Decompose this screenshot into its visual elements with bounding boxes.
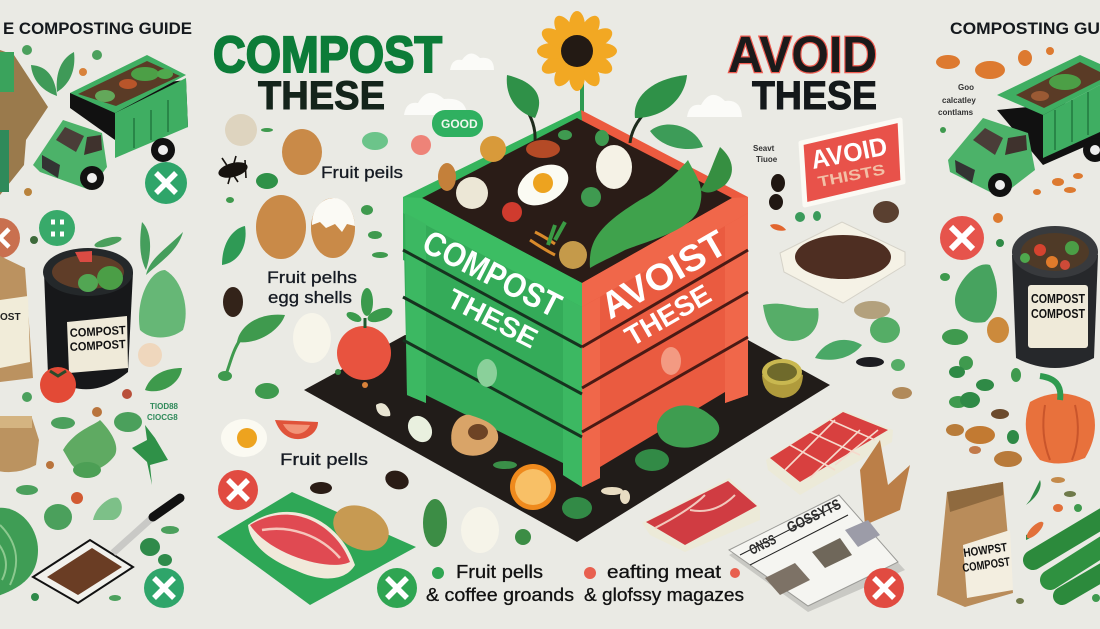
items on platform — [335, 369, 719, 519]
compost crate — [403, 110, 748, 487]
icon: right red cross — [864, 568, 904, 608]
newspaper: GOSSYTS — [784, 496, 844, 537]
coffee beans — [310, 467, 411, 494]
crate lettering avoid: AVOIST — [594, 222, 734, 327]
icon: paper bundle — [860, 440, 910, 525]
label: fruit peels egg shells — [267, 268, 357, 307]
icon: green cross bottom centre — [377, 568, 417, 608]
icon: compost bucket — [43, 248, 133, 389]
legend: avoid list: & glofssy magazes — [584, 585, 744, 605]
crate green body — [403, 197, 582, 487]
label: small note: Tiuoe — [756, 155, 778, 164]
icon: orange — [510, 464, 556, 510]
right leaf scatter — [940, 127, 1100, 604]
icon: olive bowl — [762, 359, 803, 398]
label: small note: Seavt — [753, 144, 775, 153]
newspaper — [729, 495, 905, 612]
left small note: ClOCG8 — [147, 413, 178, 422]
icon: left large cabbage — [0, 508, 38, 597]
icon: right compost bucket — [1012, 226, 1098, 368]
icon: left plant sprig — [31, 52, 74, 96]
greens pile — [657, 405, 719, 448]
legend: compost list — [426, 562, 574, 605]
legend: compost list: Fruit pells — [456, 562, 543, 582]
crate contents — [438, 130, 732, 269]
left small note: TIOD88 — [150, 402, 179, 411]
icon: meat tray right — [766, 410, 893, 495]
icon: left green badge — [39, 210, 75, 246]
icon: meat steak centre — [642, 478, 760, 552]
icon: tray of dark waste — [780, 222, 905, 303]
title: compost these: THESE — [258, 74, 385, 118]
icon: right lettuce — [955, 264, 997, 323]
newspaper: ONSS — [746, 531, 778, 558]
icon: right compost bucket: COMPOST — [1031, 291, 1085, 306]
left of crate leaves — [218, 128, 531, 547]
icon: right compost bag: COMPOST — [961, 554, 1011, 575]
icon: bell pepper — [1026, 376, 1095, 464]
icon: left flower and leaf — [138, 343, 182, 391]
title: compost these: COMPOST — [213, 26, 442, 83]
egg bottom — [461, 507, 499, 553]
icon: left sack — [0, 50, 48, 195]
label: fruit peels upper: Fruit peils — [321, 163, 403, 182]
crate lettering these green: THESE — [442, 283, 543, 354]
legend: avoid list — [584, 562, 744, 605]
left leaf scatter — [16, 45, 179, 601]
icon: right red cross — [940, 216, 984, 260]
orange scraps top right — [936, 47, 1083, 223]
icon: right compost bucket: COMPOST — [1031, 306, 1085, 321]
legend: avoid list: eafting meat — [607, 562, 721, 582]
icon: right compost bag — [937, 482, 1013, 607]
label: fruit peels egg shells: egg shells — [268, 288, 352, 307]
icon: scoop with compost — [33, 498, 180, 603]
crate lettering: COMPOST — [416, 223, 567, 325]
label: fruit peels lower: Fruit pells — [280, 450, 368, 469]
icon: left green dump truck — [33, 55, 188, 190]
right of crate items — [763, 201, 912, 399]
icon: cracked egg shell — [451, 415, 498, 456]
icon: tomato centre — [337, 288, 394, 380]
avoid sign — [801, 120, 903, 205]
avoid sign: AVOID — [808, 131, 890, 175]
icon: sunflower — [537, 11, 617, 143]
icon: right compost bag: HOWPST — [962, 540, 1009, 560]
icon: left compost bag: OST — [0, 312, 21, 323]
label: good badge — [432, 110, 483, 137]
label: small note — [753, 144, 778, 164]
icon: tomato slice — [275, 420, 318, 439]
icon: left brown cross — [0, 218, 20, 258]
icon: right green dump truck — [948, 55, 1100, 197]
title: avoid these: AVOID — [728, 26, 877, 83]
cutting board with steak — [217, 492, 416, 605]
avoid sign: THISTS — [817, 161, 887, 191]
icon: cucumbers — [1033, 517, 1100, 596]
crate red lip — [582, 197, 748, 307]
left panel heading: E COMPOSTING GUIDE — [3, 19, 192, 38]
platform — [304, 335, 830, 542]
icon: sliced egg — [221, 419, 267, 457]
icon: compost bucket: COMPOST — [69, 323, 127, 340]
egg group — [223, 114, 355, 363]
left small note — [147, 402, 179, 422]
clouds — [404, 53, 742, 117]
icon: left lettuce and sprig — [139, 222, 186, 338]
label: good badge: GOOD — [441, 117, 478, 131]
title: avoid these: THESE — [752, 74, 877, 118]
crate slat gaps — [403, 250, 582, 437]
right panel heading: COMPOSTING GU — [950, 19, 1100, 38]
label: right small note — [938, 83, 976, 117]
crate posts — [405, 213, 582, 487]
icon: beetle — [217, 156, 249, 184]
label: right small note: contlams — [938, 108, 974, 117]
label: fruit peels egg shells: Fruit pelhs — [267, 268, 357, 287]
crate slat stamps — [477, 359, 497, 387]
crate green back rim and face — [403, 110, 582, 345]
crate red body — [582, 197, 748, 487]
label: right small note: calcatley — [942, 96, 976, 105]
label: right small note: Goo — [958, 83, 974, 92]
crate lettering these red: THESE — [620, 278, 716, 352]
icon: sprout leaves — [507, 75, 703, 149]
icon: compost bucket: COMPOST — [69, 337, 127, 354]
icon: crate stamp red — [661, 347, 681, 375]
title: avoid these — [728, 26, 877, 118]
icon: left bottom green cross — [144, 568, 184, 608]
icon: tomato left — [40, 367, 76, 403]
icon: coffee beans right — [769, 174, 785, 210]
crate red back rim and face — [581, 110, 748, 345]
crate green lip — [403, 197, 582, 307]
icon: red cross centre left — [218, 470, 258, 510]
title: compost these — [213, 26, 442, 118]
crate soil — [422, 118, 732, 283]
icon: left basket — [0, 416, 39, 472]
icon: small red tag — [411, 135, 431, 155]
icon: left compost bag — [0, 256, 33, 382]
legend: compost list: & coffee groands — [426, 585, 574, 605]
crate red posts — [582, 213, 748, 487]
crate red slat gaps — [582, 250, 748, 432]
icon: left green cross badge — [145, 162, 187, 204]
